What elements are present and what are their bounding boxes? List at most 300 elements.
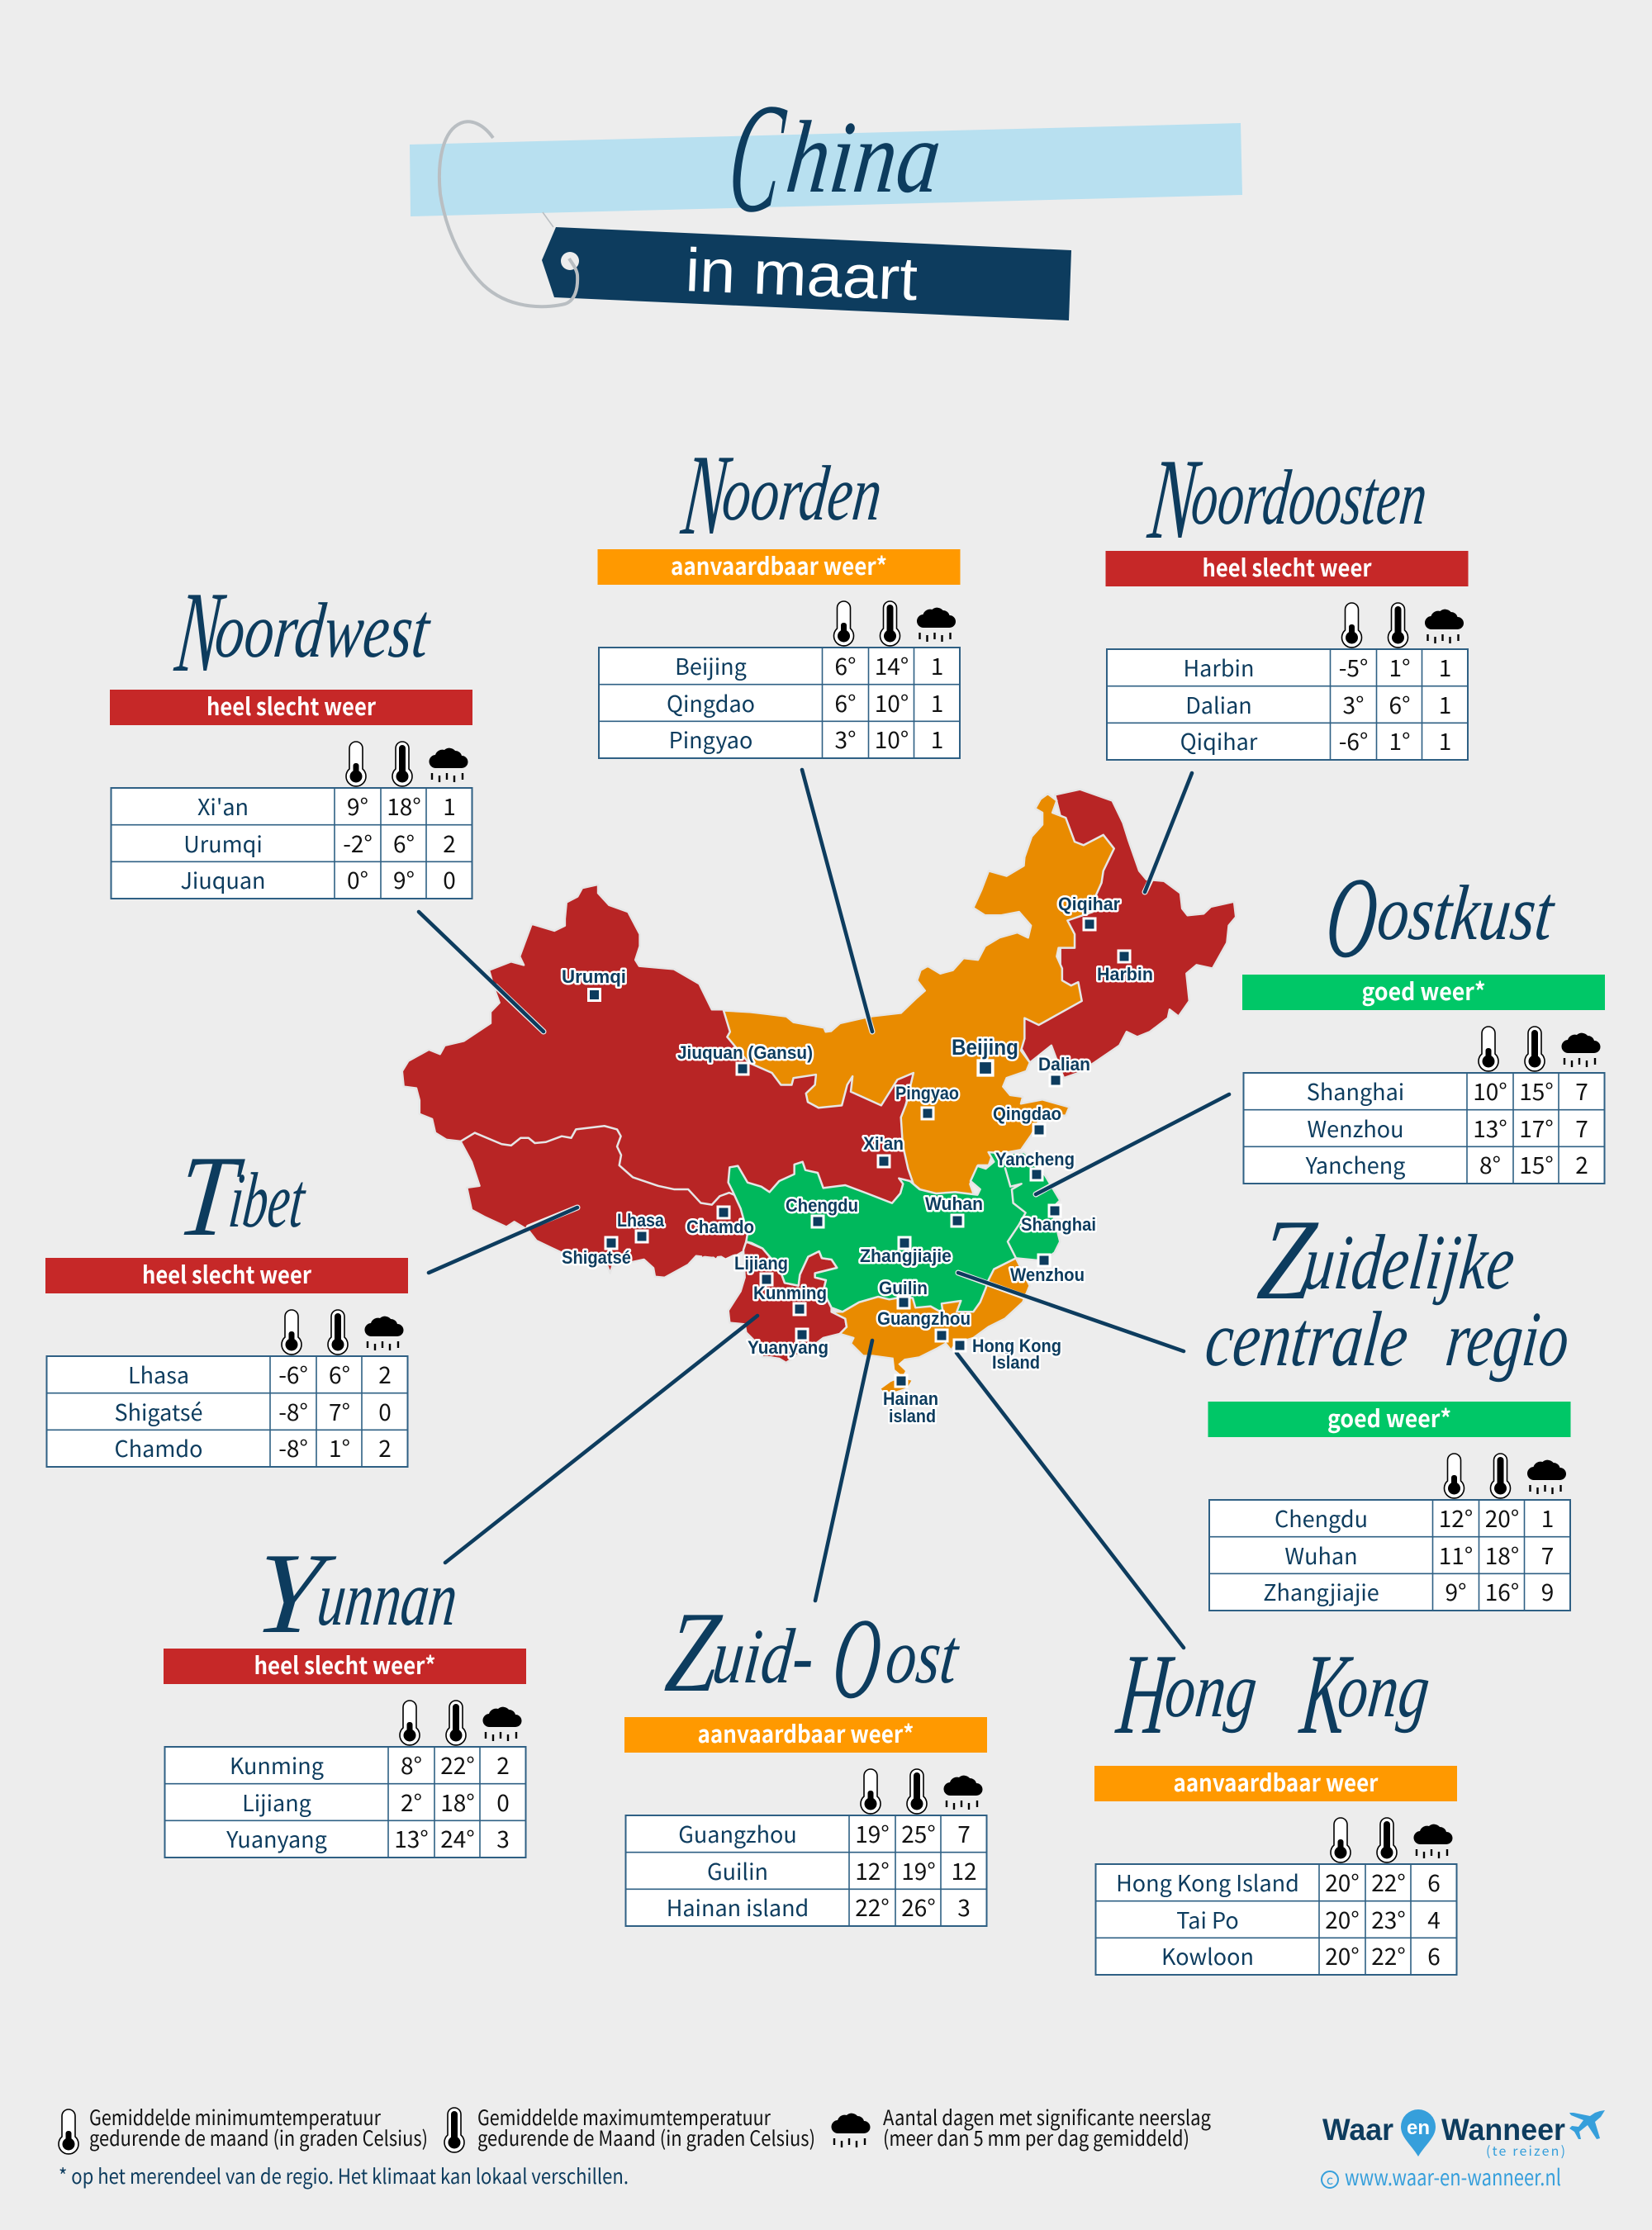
- city: Qiqihar: Qiqihar: [1058, 894, 1120, 914]
- heading: Zuidelijke centrale regio: centrale: [1202, 1295, 1412, 1383]
- banner: heel slecht weer: [164, 1649, 526, 1684]
- panel: Yunnan: [164, 1530, 526, 1858]
- table: 7: [1575, 1075, 1588, 1108]
- table: 3: [957, 1891, 971, 1924]
- weather table group: [1242, 973, 1605, 1184]
- city: Qingdao: [993, 1103, 1061, 1136]
- table: 1°: [1389, 651, 1410, 684]
- arrow: Zuid-Oost: [815, 1340, 872, 1601]
- table: [111, 788, 472, 899]
- table: Yancheng: [1305, 1148, 1405, 1180]
- heading: Zuid-Oost: O: [828, 1595, 887, 1723]
- weather table group: aanvaardbaar weer*: [697, 1715, 914, 1750]
- title block: [410, 71, 1242, 320]
- banner: goed weer: [1208, 1402, 1571, 1437]
- icons: min max rain: [282, 1310, 404, 1355]
- table: Beijing: [675, 649, 747, 681]
- icons: min max rain: [1331, 1818, 1452, 1862]
- heading: Oostkust: ostkust: [1374, 869, 1559, 956]
- table: -8°: [278, 1395, 308, 1428]
- table: 6°: [835, 649, 856, 682]
- table: Kowloon: [1161, 1939, 1254, 1971]
- city: Hong Kong Island: [953, 1336, 1061, 1373]
- table: 6°: [1389, 688, 1410, 721]
- region: Hainan: [881, 1378, 911, 1392]
- table: 9°: [1446, 1575, 1466, 1608]
- city: Harbin: Harbin: [1097, 964, 1153, 985]
- table: Tai Po: [1176, 1903, 1239, 1935]
- city: Xi'an: [863, 1133, 904, 1168]
- city: Lhasa: Lhasa: [617, 1210, 665, 1231]
- icons: min max rain: [1479, 1027, 1601, 1071]
- table: 6°: [329, 1358, 350, 1391]
- city: Qiqihar: [1058, 894, 1120, 932]
- city: Yuanyang: Yuanyang: [748, 1337, 828, 1358]
- icons: min max rain: [861, 1769, 983, 1814]
- city: Hong Kong Island: Island: [992, 1352, 1040, 1373]
- weather table group: [164, 1647, 526, 1858]
- weather table group: [598, 548, 960, 758]
- city: Jiuquan: [677, 1042, 813, 1075]
- icon: rain: [831, 2114, 871, 2147]
- table: 12: [951, 1854, 977, 1887]
- table: Dalian: [1185, 688, 1252, 720]
- table: 20°: [1485, 1502, 1519, 1535]
- footnote: * op het merendeel van de regio. Het klimaat kan lokaal verschillen.: [59, 2161, 629, 2190]
- heading: Oostkust: O: [1321, 854, 1384, 982]
- city: Chengdu: Chengdu: [786, 1195, 858, 1216]
- heading: Noordwest: oordwest: [211, 586, 435, 674]
- table: 16°: [1485, 1575, 1519, 1608]
- city: Hainan island: [883, 1374, 938, 1426]
- icon: plane: [1569, 2110, 1605, 2139]
- table: 6: [1427, 1866, 1441, 1899]
- border: Oostkust: [1005, 1167, 1026, 1258]
- table: Shanghai: [1307, 1075, 1404, 1107]
- table: 13°: [394, 1822, 429, 1855]
- weather table group: aanvaardbaar weer*: [671, 548, 887, 582]
- weather table group: [1105, 549, 1469, 760]
- city: Yancheng: Yancheng: [995, 1149, 1075, 1170]
- logo: [1322, 2109, 1605, 2192]
- heading: Hong Kong: [1112, 1630, 1434, 1758]
- table: 18°: [440, 1786, 475, 1819]
- table: 20°: [1325, 1903, 1360, 1936]
- legend text: minimum temperature: Gemiddelde minimumtemperatuur: [89, 2102, 381, 2132]
- table: 7: [1541, 1539, 1554, 1572]
- heading: Noorden: oorden: [719, 449, 886, 537]
- heading: Tibet: ibet: [225, 1156, 310, 1244]
- table: 3: [496, 1822, 510, 1855]
- legend text: minimum temperature: gedurende de maand (in graden Celsius): [89, 2123, 428, 2152]
- city: Wenzhou: [1010, 1254, 1085, 1285]
- table: [1209, 1500, 1570, 1611]
- city: Chamdo: [686, 1206, 754, 1237]
- legend text: minimum temperature: [89, 2102, 428, 2152]
- table: Hong Kong Island: [1116, 1866, 1299, 1898]
- table: Hainan island: [667, 1891, 809, 1923]
- logo word: Wanneer: Wanneer: [1441, 2113, 1565, 2147]
- table: 3°: [835, 723, 856, 756]
- table: 9°: [393, 863, 415, 896]
- table: 15°: [1519, 1148, 1554, 1181]
- heading: Yunnan: [249, 1530, 462, 1658]
- panel: Hong Kong: [1094, 1630, 1457, 1975]
- table: 18°: [387, 790, 421, 823]
- luggage tag: [542, 227, 1071, 320]
- legend: [59, 2102, 1211, 2190]
- table: -5°: [1339, 651, 1368, 684]
- icons: min max rain: [1341, 603, 1464, 648]
- heading: Hong Kong: K: [1295, 1630, 1357, 1758]
- icons: min max rain: [1444, 1454, 1566, 1498]
- table: Xi'an: [197, 790, 249, 822]
- leader lines: [419, 770, 1229, 1648]
- table: 17°: [1519, 1112, 1554, 1145]
- title: China: [722, 71, 947, 245]
- table: 0: [378, 1395, 392, 1428]
- copyright mark: c: [1327, 2169, 1333, 2189]
- logo pin: en: [1407, 2117, 1430, 2139]
- table: 0: [496, 1786, 510, 1819]
- city: Kunming: [753, 1283, 827, 1317]
- panel: Oostkust: [1242, 854, 1605, 1184]
- heading: Noordwest: N: [170, 568, 230, 696]
- table: 7°: [329, 1395, 350, 1428]
- border: Noordwest and Tibet: [461, 1126, 737, 1205]
- table: 2: [1575, 1148, 1588, 1181]
- arrow: Yunnan: [445, 1316, 757, 1563]
- table: Yuanyang: [225, 1822, 327, 1854]
- heading: Hong Kong: ong: [1161, 1646, 1261, 1734]
- table: 1: [1439, 724, 1451, 757]
- map of China: [402, 790, 1236, 1392]
- table: 19°: [855, 1817, 890, 1850]
- weather table group: [110, 688, 472, 899]
- table: Shigatsé: [115, 1395, 202, 1427]
- arrow: Tibet: [429, 1208, 577, 1273]
- weather table group: [624, 1715, 987, 1926]
- city: Lhasa: [617, 1210, 665, 1244]
- table: -2°: [343, 827, 373, 860]
- table: 23°: [1371, 1903, 1406, 1936]
- city: Pingyao: Pingyao: [895, 1083, 959, 1103]
- city: Dalian: [1038, 1054, 1090, 1087]
- table: 22°: [1371, 1866, 1406, 1899]
- table: 0°: [347, 863, 368, 896]
- table: 1: [931, 649, 943, 682]
- region: Noordoosten: [1018, 790, 1236, 1078]
- heading: Zuid-Oost: [661, 1588, 964, 1723]
- city: Urumqi: Urumqi: [562, 966, 626, 987]
- table: [599, 648, 960, 758]
- table: 10°: [875, 723, 909, 756]
- arrow: Zuidelijke centrale regio: [958, 1273, 1184, 1351]
- table: 22°: [1371, 1939, 1406, 1972]
- logo pin: [1401, 2109, 1436, 2156]
- table: [1095, 1864, 1457, 1975]
- panel: Noorden: [598, 431, 960, 758]
- table: 9°: [347, 790, 368, 823]
- table: Wenzhou: [1307, 1112, 1404, 1144]
- city: Wuhan: [925, 1193, 983, 1227]
- city: Lijiang: Lijiang: [734, 1253, 788, 1274]
- table: Qingdao: [667, 686, 755, 719]
- city: Beijing: Beijing: [952, 1035, 1018, 1060]
- arrow: Oostkust: [1036, 1094, 1229, 1194]
- city: Xi'an: Xi'an: [863, 1133, 904, 1154]
- table: 2: [378, 1358, 392, 1391]
- table: 0: [443, 863, 456, 896]
- table: 12°: [1439, 1502, 1473, 1535]
- region: Noordwest and Tibet west: [402, 885, 876, 1278]
- table: 3°: [1343, 688, 1364, 721]
- banner: aanvaardbaar weer: [624, 1717, 987, 1753]
- city: Hong Kong Island: Hong Kong: [972, 1336, 1061, 1356]
- weather table group: goed weer*: [1327, 1400, 1451, 1435]
- weather table group: [45, 1256, 408, 1467]
- table: 10°: [875, 686, 909, 719]
- city: Beijing: [952, 1035, 1018, 1077]
- subtitle: in maart: in maart: [684, 235, 919, 313]
- heading: Zuidelijke centrale regio: Z: [1253, 1196, 1322, 1324]
- panel: Tibet: [45, 1132, 408, 1467]
- table: 6°: [393, 827, 415, 860]
- heading: Noordoosten: N: [1143, 435, 1206, 563]
- city: Zhangjiajie: [860, 1236, 952, 1266]
- panel: Noordoosten: [1105, 435, 1469, 760]
- title: China: C: [722, 71, 792, 245]
- title: China: hina: [781, 100, 947, 215]
- banner: goed weer: [1242, 975, 1605, 1010]
- weather table group: [1208, 1400, 1571, 1611]
- table: 2: [496, 1748, 510, 1782]
- table: 2°: [401, 1786, 422, 1819]
- table: Lhasa: [128, 1358, 189, 1390]
- table: 20°: [1325, 1866, 1360, 1899]
- heading: Noordoosten: [1143, 435, 1431, 563]
- weather table group: heel slecht weer: [206, 688, 376, 723]
- region: Noorden: [724, 794, 1114, 1196]
- heading: Zuid-Oost: ost: [882, 1612, 964, 1700]
- table: 1: [931, 723, 943, 756]
- city: Shigatse: Shigatsé: [562, 1247, 631, 1268]
- table: 18°: [1485, 1539, 1519, 1572]
- table: Chengdu: [1275, 1502, 1368, 1534]
- table: 1°: [329, 1431, 350, 1464]
- city: Shigatse: [562, 1236, 631, 1268]
- city: Kunming: Kunming: [753, 1283, 827, 1303]
- logo word: Waar: Waar: [1322, 2113, 1393, 2147]
- table: Guangzhou: [678, 1817, 797, 1849]
- table: 1: [931, 686, 943, 719]
- table: 7: [957, 1817, 971, 1850]
- table: [46, 1356, 408, 1467]
- table: 26°: [901, 1891, 936, 1924]
- heading: Zuidelijke centrale regio: uidelijke: [1300, 1218, 1519, 1306]
- table: 8°: [401, 1748, 422, 1782]
- panel: Zuid-Oost: [624, 1588, 987, 1926]
- region: Zuid-Oost and Hong Kong: [832, 1258, 1030, 1360]
- city: Guilin: Guilin: [879, 1278, 928, 1298]
- region: Tibet south edge: [702, 1225, 746, 1258]
- table: [1244, 1073, 1604, 1184]
- table: 1°: [1389, 724, 1410, 757]
- table: 1: [1541, 1502, 1554, 1535]
- table: 2: [443, 827, 456, 860]
- table: Kunming: [230, 1748, 324, 1781]
- banner: heel slecht weer: [1105, 551, 1469, 586]
- city: Wuhan: Wuhan: [925, 1193, 983, 1214]
- map city labels: [562, 894, 1153, 1426]
- city: Guangzhou: [877, 1308, 971, 1343]
- heading: Zuidelijke centrale regio: regio: [1442, 1295, 1574, 1383]
- table: 19°: [901, 1854, 936, 1887]
- icons: min max rain: [834, 601, 956, 646]
- icons: min max rain: [400, 1701, 522, 1745]
- city: Guangzhou: Guangzhou: [877, 1308, 971, 1329]
- logo tagline: (te reizen): [1486, 2140, 1565, 2160]
- table: [1107, 649, 1468, 760]
- table: 9: [1541, 1575, 1554, 1608]
- arrow: Noorden: [802, 770, 872, 1032]
- region: Hainan neck: [894, 1357, 905, 1376]
- heading: Oostkust: [1321, 854, 1559, 982]
- table: Qiqihar: [1180, 724, 1258, 757]
- silver ring: [439, 121, 577, 306]
- weather table group: heel slecht weer: [1203, 549, 1372, 584]
- icon: maximum temperature: [444, 2108, 464, 2152]
- city: Yancheng: [995, 1149, 1075, 1181]
- table: [165, 1747, 525, 1858]
- heading: Noordwest: [170, 568, 435, 696]
- legend text: maximum temperature: Gemiddelde maximumtemperatuur: [477, 2102, 771, 2132]
- banner: aanvaardbaar weer: [1094, 1766, 1457, 1801]
- heading: Tibet: [173, 1132, 310, 1260]
- banner: aanvaardbaar weer: [598, 549, 960, 585]
- weather table group: aanvaardbaar weer: [1173, 1764, 1379, 1799]
- table: -8°: [278, 1431, 308, 1464]
- icons: min max rain: [346, 742, 468, 786]
- banner: heel slecht weer: [110, 690, 472, 725]
- table: -6°: [1339, 724, 1368, 757]
- city: Shanghai: [1021, 1204, 1096, 1235]
- table: 20°: [1325, 1939, 1360, 1972]
- weather table group: heel slecht weer: [142, 1256, 311, 1291]
- table: Jiuquan: [180, 863, 266, 895]
- table: 11°: [1439, 1539, 1473, 1572]
- region: Zuidelijke centrale regio and Oostkust: [729, 1152, 1060, 1313]
- table: 13°: [1473, 1112, 1507, 1145]
- table: 4: [1427, 1903, 1441, 1936]
- arrow: Hong Kong: [957, 1353, 1184, 1648]
- table: 8°: [1479, 1148, 1501, 1181]
- table: 10°: [1473, 1075, 1507, 1108]
- thin tag string: [543, 212, 553, 227]
- table: Lijiang: [242, 1786, 311, 1818]
- heading: Hong Kong: ong: [1334, 1646, 1434, 1734]
- table: Chamdo: [115, 1431, 202, 1464]
- panel: Noordwest: [110, 568, 472, 899]
- table: 1: [443, 790, 456, 823]
- table: Guilin: [707, 1854, 768, 1886]
- city: Dalian: Dalian: [1038, 1054, 1090, 1075]
- table: 7: [1575, 1112, 1588, 1145]
- table: 15°: [1519, 1075, 1554, 1108]
- title band: [410, 123, 1242, 216]
- weather table group: goed weer*: [1361, 973, 1485, 1008]
- city: Hainan island: Hainan: [883, 1388, 938, 1409]
- table: 12°: [855, 1854, 890, 1887]
- weather table group: heel slecht weer*: [254, 1647, 436, 1682]
- city: Guilin: [879, 1278, 928, 1310]
- city: Zhangjiajie: Zhangjiajie: [860, 1245, 952, 1266]
- city: Qingdao: Qingdao: [993, 1103, 1061, 1124]
- table: 22°: [855, 1891, 890, 1924]
- table: 6: [1427, 1939, 1441, 1972]
- arrow: Noordwest: [419, 912, 544, 1032]
- website: www.waar-en-wanneer.nl: [1345, 2160, 1561, 2192]
- city: Chengdu: [786, 1195, 858, 1229]
- table: Pingyao: [669, 723, 752, 755]
- arrow: Noordoosten: [1145, 773, 1192, 892]
- table: 1: [1439, 688, 1451, 721]
- legend text: rain days: [883, 2102, 1211, 2152]
- weather table group: [1094, 1764, 1457, 1975]
- banner: heel slecht weer: [45, 1258, 408, 1293]
- table: 2: [378, 1431, 392, 1464]
- table: Urumqi: [183, 827, 263, 859]
- table: 14°: [875, 649, 909, 682]
- city: Hainan island: island: [889, 1406, 936, 1426]
- city: Wenzhou: Wenzhou: [1010, 1264, 1085, 1285]
- table: 1: [1439, 651, 1451, 684]
- table: Harbin: [1184, 651, 1254, 683]
- city: Chamdo: Chamdo: [686, 1217, 754, 1237]
- panel: Zuidelijke centrale regio: [1202, 1196, 1574, 1611]
- icon: minimum temperature: [59, 2109, 78, 2154]
- table: 6°: [835, 686, 856, 719]
- heading: Yunnan: unnan: [314, 1554, 462, 1642]
- table: Zhangjiajie: [1263, 1575, 1379, 1607]
- heading: Noorden: [676, 431, 886, 559]
- table: 25°: [901, 1817, 936, 1850]
- heading: Noordoosten: oordoosten: [1188, 453, 1431, 541]
- city: Urumqi: [562, 966, 626, 1002]
- heading: Yunnan: Y: [249, 1530, 339, 1658]
- heading: Tibet: T: [173, 1132, 249, 1260]
- city: Pingyao: [895, 1083, 959, 1120]
- table: 24°: [440, 1822, 475, 1855]
- legend text: rain days: Aantal dagen met significante neerslag: [883, 2102, 1211, 2132]
- region: Yunnan: [729, 1241, 847, 1363]
- region: Noordwest east: [702, 1011, 914, 1205]
- table: Wuhan: [1284, 1539, 1358, 1571]
- table: -6°: [278, 1358, 308, 1391]
- city: Lijiang: [734, 1253, 788, 1287]
- legend text: rain days: (meer dan 5 mm per dag gemiddeld): [883, 2123, 1189, 2152]
- tag hole: [561, 252, 579, 270]
- heading: Zuid-Oost: uid-: [709, 1612, 819, 1700]
- heading: Zuid-Oost: Z: [661, 1588, 727, 1716]
- heading: Zuidelijke centrale regio: [1202, 1196, 1574, 1383]
- copyright mark: [1322, 2169, 1338, 2189]
- table: 22°: [440, 1748, 475, 1782]
- city: Shanghai: Shanghai: [1021, 1214, 1096, 1235]
- legend text: maximum temperature: gedurende de Maand (in graden Celsius): [477, 2123, 815, 2152]
- heading: Hong Kong: H: [1112, 1630, 1179, 1758]
- city: Harbin: [1097, 950, 1153, 985]
